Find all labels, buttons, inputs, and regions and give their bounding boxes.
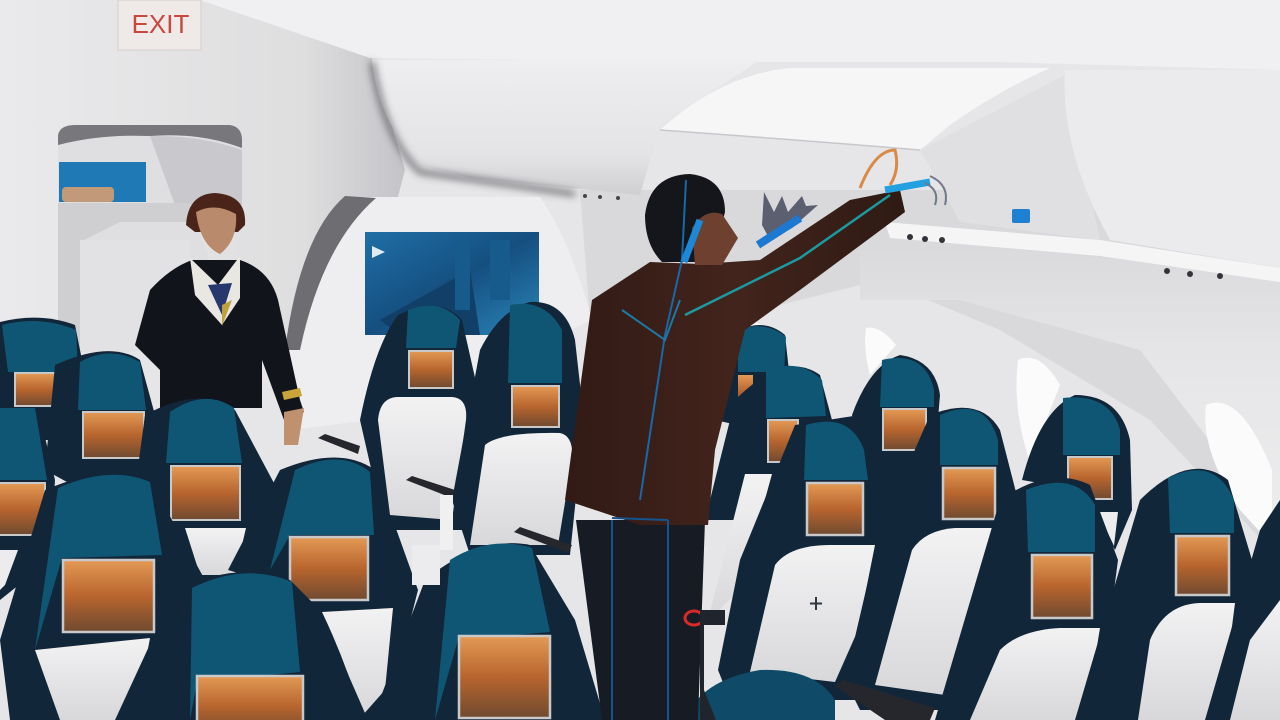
flight attendant [135, 193, 304, 445]
seat: mid row A [718, 415, 892, 700]
overhead bin: closed left section [372, 60, 760, 200]
cabin windows [745, 318, 1272, 545]
seat: bottom front [685, 670, 835, 720]
overhead bin: open door [660, 68, 1050, 150]
seat: front left large [0, 473, 205, 720]
open bin interior [920, 75, 1100, 240]
seat: right edge [1205, 500, 1280, 720]
armrest: bottom right [835, 680, 935, 720]
passenger legs [576, 520, 705, 720]
exit sign: EXIT [132, 9, 190, 39]
exit sign [118, 0, 201, 50]
passenger head [645, 174, 725, 262]
passenger torso and arm [565, 190, 905, 525]
seat: front row C [935, 478, 1118, 720]
motion capture skeleton [612, 150, 946, 720]
seat: right far 4 [1022, 395, 1132, 550]
seat: right far 1 [715, 325, 790, 430]
seat: row left 3 [135, 399, 275, 580]
seat: right far 2 [705, 366, 832, 620]
seat: aisle back 2 [452, 302, 584, 555]
seat: far left edge [0, 407, 55, 600]
galley doorway [58, 125, 258, 400]
armrests [318, 434, 572, 585]
passenger reaching to bin [565, 174, 905, 720]
seat: center aisle row [228, 458, 418, 720]
bulkhead monitor wall [285, 196, 592, 430]
bin shelf [885, 209, 1280, 282]
overhead bin: closed right section [1065, 70, 1280, 268]
foot block near red marker [700, 610, 725, 720]
seat: row left 1 [0, 318, 85, 440]
seat: front center bottom [115, 572, 368, 720]
seat: aisle back 1 [360, 306, 480, 530]
seat: row left 2 [45, 351, 170, 500]
seat: front centre aisle [372, 543, 605, 720]
ceiling panel [200, 0, 1280, 70]
seat: right far 3 [852, 355, 940, 505]
seat: front row D [1075, 469, 1252, 720]
passenger raised hand [762, 192, 818, 240]
seat: mid row B [845, 408, 1018, 710]
cursor crosshair [810, 597, 822, 610]
